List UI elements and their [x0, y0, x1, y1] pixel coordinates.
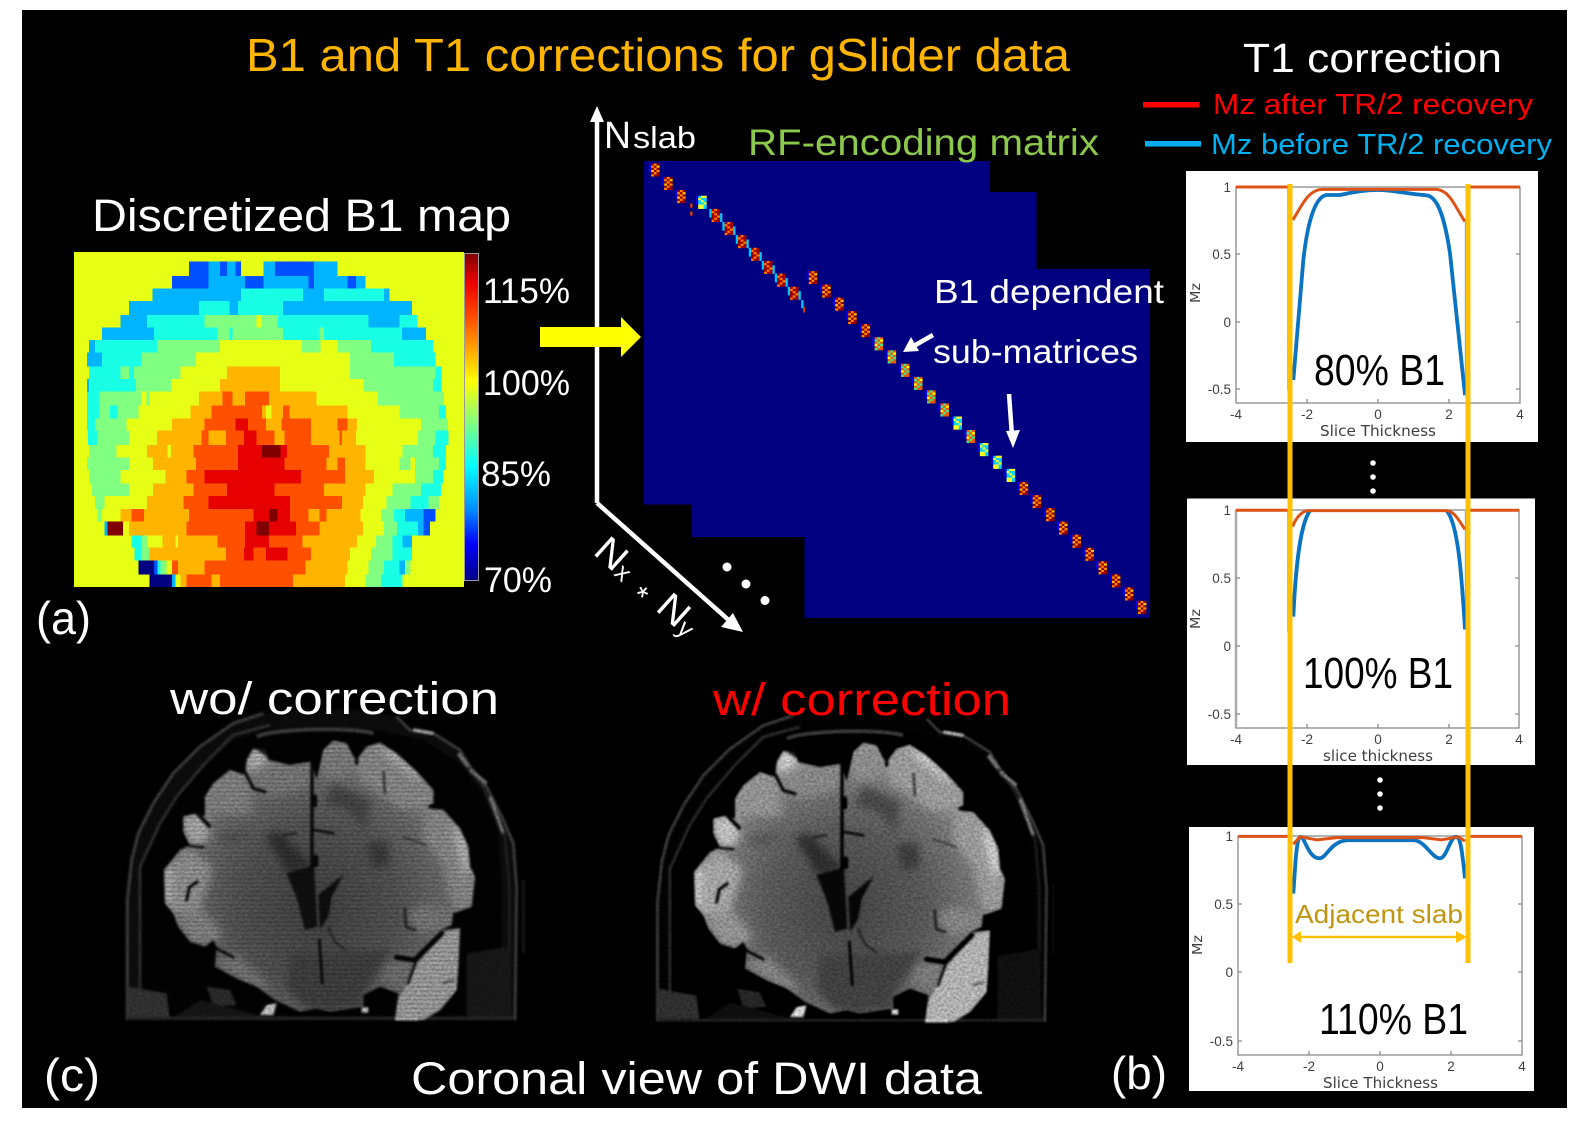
- callout: B1 dependent sub-matrices: sub-matrices: [933, 333, 1138, 370]
- chart: 110% B1: -4: [1232, 1059, 1244, 1074]
- heading: T1 correction: T1 correction: [1243, 35, 1502, 81]
- chart: 110% B1: Mz: [1190, 935, 1206, 955]
- chart: 110% B1: 0: [1376, 1059, 1384, 1074]
- chart: 80% B1: 0.5: [1212, 247, 1231, 262]
- chart: 100% B1: 4: [1515, 732, 1523, 747]
- chart: 110% B1: 110% B1: [1319, 995, 1468, 1044]
- chart: 110% B1: 0: [1225, 965, 1233, 980]
- double arrow: adjacent slab width: [1292, 931, 1467, 943]
- axis label Nx * Ny: *: [624, 580, 655, 612]
- axes arrows: [590, 106, 743, 632]
- axis label Nx * Ny: x: [609, 558, 637, 588]
- ellipsis dots: [722, 562, 770, 605]
- chart: 80% B1: [1186, 171, 1538, 442]
- brain image without correction: [90, 700, 570, 1022]
- chart: 110% B1: 1: [1225, 829, 1233, 844]
- matrix stack: [644, 161, 1150, 618]
- chart: 100% B1: 2: [1445, 732, 1453, 747]
- axis label Nx * Ny: [581, 528, 708, 651]
- chart: 100% B1: Mz: [1188, 609, 1204, 629]
- heading: RF-encoding matrix: RF-encoding matrix: [748, 122, 1100, 163]
- colorbar label 115%: 115%: [483, 272, 570, 311]
- panel label (b): (b): [1111, 1047, 1167, 1099]
- chart: 100% B1: -0.5: [1208, 707, 1231, 722]
- arrow: yellow map to matrix: [540, 317, 641, 357]
- chart: 100% B1: [1187, 498, 1535, 765]
- chart: 80% B1: 80% B1: [1314, 346, 1445, 395]
- axis label Nx * Ny: y: [671, 614, 700, 644]
- chart: 80% B1: 1: [1223, 180, 1231, 195]
- chart: 100% B1: -2: [1301, 732, 1313, 747]
- chart: 80% B1: Slice Thickness: [1320, 422, 1436, 440]
- chart: 100% B1: 0.5: [1212, 571, 1231, 586]
- chart: 100% B1: -4: [1230, 732, 1242, 747]
- chart: 110% B1: Slice Thickness: [1323, 1074, 1438, 1092]
- colorbar label 100%: 100%: [483, 364, 570, 403]
- chart: 110% B1: [1189, 827, 1534, 1092]
- panel label (c): (c): [44, 1049, 100, 1101]
- panel: discretized B1 map: [36, 190, 570, 644]
- chart: 100% B1: 0: [1223, 639, 1231, 654]
- chart: 80% B1: -0.5: [1208, 382, 1231, 397]
- colorbar label 70%: 70%: [484, 561, 552, 600]
- B1 map heatmap: [74, 252, 464, 587]
- brain image with correction: [620, 702, 1100, 1024]
- chart: 100% B1: 1: [1223, 503, 1231, 518]
- chart: 80% B1: 2: [1445, 407, 1453, 422]
- axis label Nx * Ny: N: [587, 528, 636, 579]
- chart: 80% B1: Mz: [1188, 283, 1204, 303]
- chart: 110% B1: 4: [1518, 1059, 1526, 1074]
- axis label Nslab: [604, 115, 696, 157]
- heading: Discretized B1 map: Discretized B1 map: [92, 190, 511, 241]
- chart: 100% B1: 0: [1374, 732, 1382, 747]
- panel label (a): (a): [36, 592, 91, 644]
- colorbar label 85%: 85%: [481, 455, 551, 494]
- ellipsis dots between charts: [1377, 777, 1383, 811]
- ellipsis dots between charts: [1370, 460, 1376, 494]
- arrow to sub-matrix: [903, 335, 933, 352]
- chart: 100% B1: slice thickness: [1323, 747, 1433, 765]
- chart: 110% B1: 2: [1447, 1059, 1455, 1074]
- heading: w/ correction: w/ correction: [712, 674, 1011, 725]
- chart: 80% B1: 0: [1374, 407, 1382, 422]
- chart: 110% B1: -2: [1303, 1059, 1315, 1074]
- chart: 80% B1: -2: [1301, 407, 1313, 422]
- axis label Nx * Ny: N: [649, 585, 699, 635]
- axis label Nslab: N: [604, 115, 631, 157]
- title: B1 and T1 corrections for gSlider data: [246, 29, 1070, 81]
- annotation: Adjacent slab: Adjacent slab: [1295, 899, 1463, 929]
- callout: B1 dependent sub-matrices: B1 dependent: [934, 273, 1164, 310]
- chart: 80% B1: -4: [1230, 407, 1242, 422]
- legend: before recovery: Mz before TR/2 recovery: [1211, 129, 1553, 161]
- arrow to sub-matrix: [1006, 394, 1020, 448]
- caption: Coronal view of DWI data: [411, 1053, 983, 1104]
- chart: 110% B1: -0.5: [1210, 1034, 1233, 1049]
- chart: 100% B1: 100% B1: [1303, 649, 1453, 698]
- panel: RF-encoding matrix: [581, 106, 1164, 651]
- panel: coronal DWI comparison: [44, 673, 1100, 1104]
- chart: 80% B1: 4: [1516, 407, 1524, 422]
- axis label Nslab: slab: [633, 120, 696, 155]
- chart: 80% B1: 0: [1223, 315, 1231, 330]
- callout: B1 dependent sub-matrices: [903, 273, 1164, 448]
- heading: wo/ correction: wo/ correction: [169, 673, 499, 724]
- slab boundary lines: [1288, 184, 1470, 963]
- legend: after recovery: Mz after TR/2 recovery: [1213, 89, 1534, 121]
- panel: T1 correction: [1143, 35, 1553, 1092]
- chart: 110% B1: 0.5: [1214, 897, 1233, 912]
- colorbar: [464, 254, 478, 580]
